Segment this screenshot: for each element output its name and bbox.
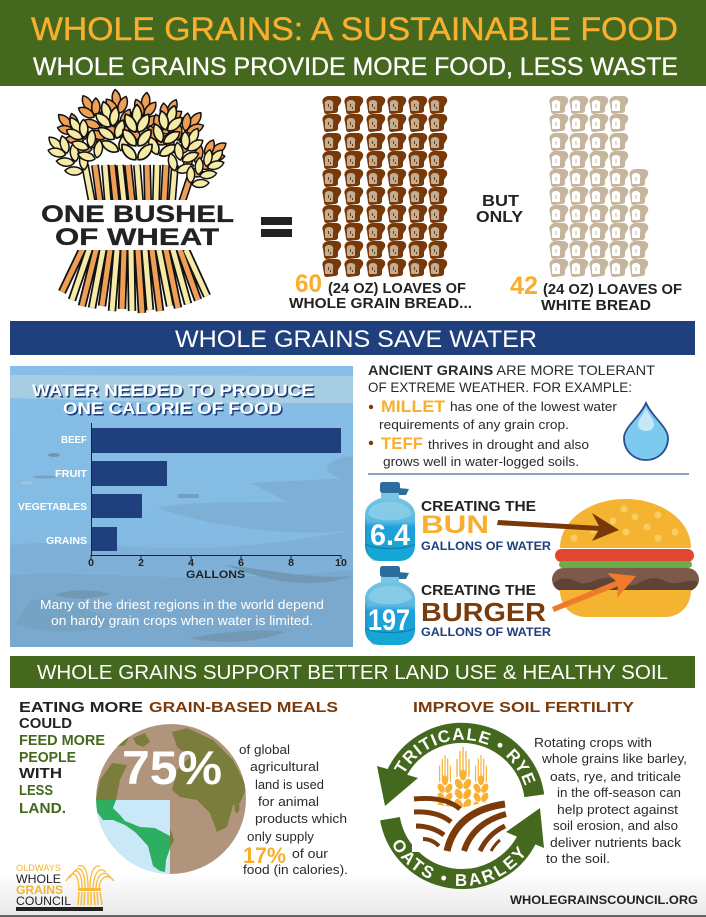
ancient grains text: has one of the lowest water — [450, 400, 617, 414]
bottle: 6.4 gallons — [365, 482, 415, 561]
ancient grains text: MILLET — [381, 397, 446, 416]
bar chart: gallons per calorie: VEGETABLES — [18, 501, 87, 513]
crop names on arcs: TRITICALE • RYE — [394, 728, 536, 786]
panel: water chart — [10, 366, 353, 647]
ancient grains text: grows well in water-logged soils. — [383, 455, 579, 469]
heading: grain-based meals: FEED MORE — [19, 733, 105, 749]
sheaf band — [30, 200, 245, 250]
crop rotation text: help protect against — [557, 802, 678, 817]
logo: Oldways Whole Grains Council: OLDWAYS — [16, 863, 61, 874]
crop rotation text: deliver nutrients back — [550, 835, 682, 850]
burger label: GALLONS OF WATER — [421, 627, 552, 639]
bun label — [421, 499, 552, 553]
globe stat text: agricultural — [250, 759, 319, 774]
upper stalks — [85, 165, 190, 202]
loaves: whole grain pictogram — [322, 96, 447, 277]
whole grain loaves caption: 60 — [295, 270, 322, 298]
chart title: WATER NEEDED TO PRODUCE — [32, 381, 314, 400]
rear heads — [47, 87, 235, 186]
label: one bushel of wheat: ONE BUSHEL — [41, 201, 234, 228]
globe stat text: food (in calories). — [243, 862, 348, 877]
chart caption: Many of the driest regions in the world depend — [40, 597, 324, 612]
heading: improve soil fertility: IMPROVE SOIL FERTILITY — [413, 699, 634, 716]
but only — [476, 193, 524, 226]
whole grain loaves caption: (24 OZ) LOAVES OF — [328, 281, 466, 297]
quarter slice — [96, 800, 170, 875]
bar chart: gallons per calorie: FRUIT — [55, 468, 88, 480]
footer shading — [0, 872, 706, 915]
bottle: 197 gallons: 197 — [368, 604, 410, 637]
globe stat text: for animal — [258, 794, 319, 809]
arrow: bun — [497, 513, 619, 541]
heading: grain-based meals: LESS — [19, 783, 53, 799]
chart title: WATER NEEDED TO PRODUCE — [34, 382, 316, 402]
crop rotation text: whole grains like barley, — [541, 751, 687, 766]
heading: grain-based meals: GRAIN-BASED MEALS — [149, 700, 338, 716]
crop rotation text: to the soil. — [546, 851, 610, 866]
logo: Oldways Whole Grains Council: WHOLE — [16, 872, 61, 886]
section band: land use — [10, 656, 695, 688]
globe stat text: only supply — [247, 829, 315, 844]
globe stat text: products which — [255, 811, 347, 826]
but only: ONLY — [476, 209, 524, 226]
heading: grain-based meals: COULD — [19, 716, 72, 732]
bar chart: gallons per calorie: GALLONS — [186, 569, 245, 581]
crop rotation text: soil erosion, and also — [553, 818, 678, 833]
bottle: 197 gallons — [365, 566, 415, 645]
logo: Oldways Whole Grains Council: GRAINS — [16, 883, 63, 897]
label: one bushel of wheat: OF WHEAT — [55, 224, 219, 251]
section band: land use: WHOLE GRAINS SUPPORT BETTER LAND USE & HEALTHY SOIL — [37, 661, 668, 684]
bar chart: gallons per calorie: 0 — [88, 557, 94, 569]
equals sign — [261, 217, 292, 237]
bar chart: gallons per calorie: BEEF — [61, 434, 88, 446]
bar chart: gallons per calorie: 10 — [335, 557, 347, 569]
section band: save water — [10, 321, 695, 355]
bar chart: gallons per calorie: 8 — [288, 557, 294, 569]
chart caption: on hardy grain crops when water is limited. — [51, 613, 313, 628]
globe pie chart — [96, 724, 247, 875]
ancient grains text: OF EXTREME WEATHER. FOR EXAMPLE: — [368, 379, 632, 395]
logo: Oldways Whole Grains Council: COUNCIL — [16, 894, 71, 908]
globe pie chart: 75% — [122, 741, 222, 794]
ancient grains text: ANCIENT GRAINS ARE MORE TOLERANT — [368, 362, 655, 378]
globe stat text: 17% — [243, 843, 286, 868]
main title: WHOLE GRAINS: A SUSTAINABLE FOOD — [31, 11, 678, 47]
icon: hamburger — [552, 499, 699, 617]
lower stalks — [62, 250, 207, 313]
globe stat text — [239, 742, 348, 877]
whole grain loaves caption — [289, 270, 472, 312]
bar chart: gallons per calorie — [18, 423, 347, 581]
crop rotation text: oats, rye, and triticale — [550, 769, 681, 784]
label: one bushel of wheat — [41, 201, 234, 251]
crop rotation logo: OATS • BARLEY — [393, 840, 524, 886]
white bread loaves caption: WHITE BREAD — [541, 298, 651, 314]
arrow: burger — [552, 573, 636, 612]
website url: WHOLEGRAINSCOUNCIL.ORG — [510, 893, 698, 907]
subtitle: WHOLE GRAINS PROVIDE MORE FOOD, LESS WASTE — [33, 53, 678, 81]
burger label: CREATING THE — [421, 583, 536, 599]
grain stalks — [436, 747, 490, 812]
bar chart: gallons per calorie: 6 — [238, 557, 244, 569]
white bread loaves caption: 42 — [510, 272, 538, 300]
bar chart: gallons per calorie: GRAINS — [46, 535, 87, 547]
ancient grains text — [368, 362, 655, 469]
heading: grain-based meals: LAND. — [19, 801, 66, 817]
ancient grains text: TEFF — [381, 434, 423, 453]
chart title: ONE CALORIE OF FOOD — [63, 399, 282, 418]
burger label: BURGER — [421, 597, 546, 627]
bar chart: gallons per calorie: 4 — [188, 557, 194, 569]
loaves: white bread pictogram — [549, 96, 648, 277]
crop rotation text: in the off-season can — [557, 785, 681, 800]
crop rotation text — [534, 735, 687, 866]
bottle: 6.4 gallons: 6.4 — [370, 519, 410, 552]
top arrow arc — [396, 733, 534, 796]
crop rotation logo — [377, 722, 544, 889]
globe stat text: of our — [292, 846, 329, 861]
whole grain loaves caption: WHOLE GRAIN BREAD... — [289, 296, 472, 312]
chart title: ONE CALORIE OF FOOD — [64, 400, 284, 420]
bun label: BUN — [421, 511, 489, 539]
bottom arrow arc — [390, 819, 527, 879]
header banner — [0, 0, 706, 86]
heading: grain-based meals: PEOPLE — [19, 750, 76, 766]
logo: Oldways Whole Grains Council — [16, 863, 114, 911]
icon: water drop — [624, 403, 668, 460]
soil furrows — [412, 798, 506, 852]
front cream heads — [38, 96, 234, 196]
bun label: CREATING THE — [421, 499, 536, 515]
section band: save water: WHOLE GRAINS SAVE WATER — [175, 326, 537, 353]
ancient grains text: requirements of any grain crop. — [379, 418, 569, 432]
white bread loaves caption — [510, 272, 682, 314]
white bread loaves caption: (24 OZ) LOAVES OF — [543, 282, 682, 298]
wheat sheaf illustration — [30, 87, 245, 313]
bun label: GALLONS OF WATER — [421, 541, 552, 553]
bar chart: gallons per calorie: 2 — [138, 557, 144, 569]
heading: grain-based meals: EATING MORE — [19, 700, 143, 716]
globe stat text: land is used — [255, 777, 324, 792]
globe stat text: of global — [239, 742, 290, 757]
chart title — [32, 381, 316, 420]
but only: BUT — [482, 193, 520, 210]
ancient grains text: thrives in drought and also — [428, 438, 589, 452]
burger label — [421, 583, 552, 639]
heading: grain-based meals — [19, 700, 338, 817]
chart caption — [40, 597, 324, 628]
heading: grain-based meals: WITH — [19, 766, 62, 782]
crop rotation text: Rotating crops with — [534, 735, 652, 750]
